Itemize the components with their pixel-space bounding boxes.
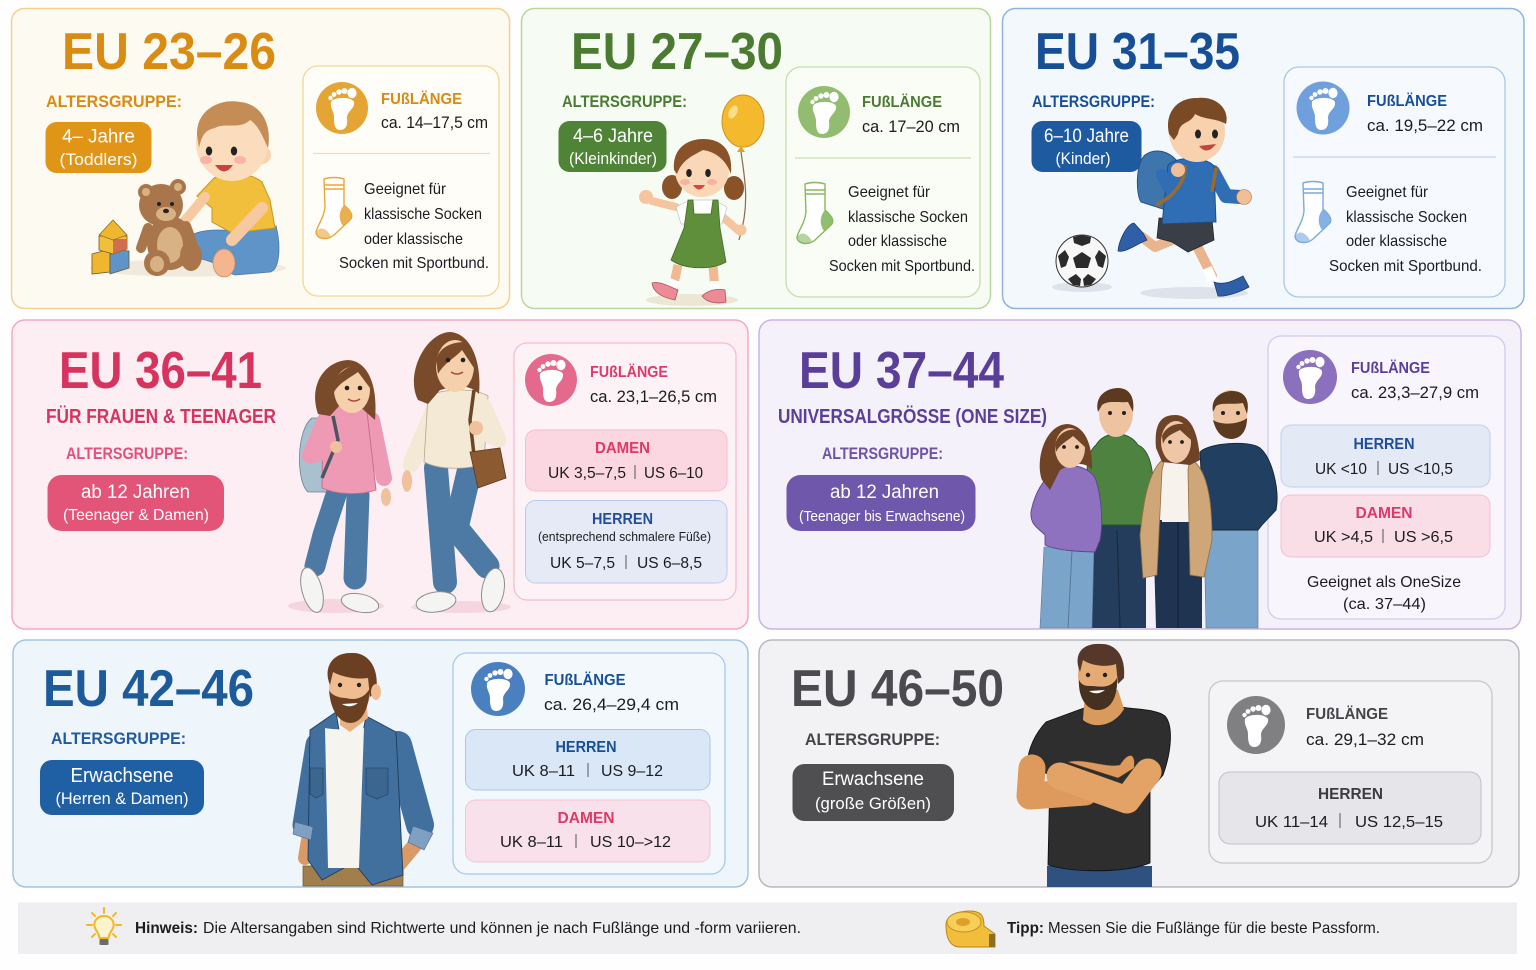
age badge: (Toddlers) — [60, 150, 138, 169]
icon: foot — [471, 662, 525, 716]
age badge: (Kinder) — [1056, 149, 1110, 168]
title: EU 37–44: EU 37–44 — [799, 342, 1004, 400]
foot length: ca. 23,1–26,5 cm — [590, 388, 717, 406]
icon: foot — [1227, 696, 1285, 754]
size box: Herren: HERREN — [1354, 436, 1414, 453]
size box: Herren: US <10,5 — [1388, 461, 1453, 478]
icon: foot — [1283, 350, 1337, 404]
size box: Damen — [1281, 495, 1490, 557]
age badge: 6–10 Jahre — [1044, 126, 1129, 147]
size box: Damen — [466, 800, 710, 862]
illustration: man in denim shirt — [293, 653, 433, 886]
title: EU 31–35: EU 31–35 — [1035, 23, 1240, 81]
panel: EU 46–50 — [759, 640, 1519, 887]
suitability text — [339, 181, 489, 272]
info card — [514, 343, 736, 600]
size box: Herren: HERREN — [592, 511, 653, 528]
foot length: ca. 14–17,5 cm — [381, 114, 488, 132]
size box: Herren: US 6–8,5 — [637, 555, 702, 572]
foot length: FUßLÄNGE — [1367, 93, 1447, 110]
age group label: ALTERSGRUPPE: — [66, 444, 188, 463]
suitability text: Geeignet für — [1346, 184, 1429, 201]
foot length: FUßLÄNGE — [381, 91, 462, 108]
suitability text: Socken mit Sportbund. — [829, 258, 975, 275]
note: Hinweis: Die Altersangaben sind Richtwerte und können je nach Fußlänge und -form variieren. — [203, 920, 801, 937]
age badge: (Teenager & Damen) — [63, 507, 209, 524]
size box: Damen: DAMEN — [1356, 505, 1412, 522]
footer note bar — [18, 902, 1517, 954]
info card — [453, 653, 725, 874]
size box: Herren: UK 11–14 — [1255, 814, 1328, 831]
size box: Damen — [526, 430, 727, 491]
foot length: ca. 17–20 cm — [862, 118, 960, 136]
size box: Herren: US 12,5–15 — [1355, 814, 1443, 831]
age badge: (Herren & Damen) — [56, 789, 188, 808]
age badge — [48, 475, 224, 531]
size box: Damen: DAMEN — [595, 440, 650, 457]
foot length — [381, 91, 488, 132]
age badge — [1032, 121, 1142, 172]
illustration: teen girl and woman — [288, 332, 511, 616]
size box: Herren: UK 5–7,5 — [550, 555, 615, 572]
size box: Herren — [1281, 425, 1490, 487]
age group label: ALTERSGRUPPE: — [562, 92, 687, 111]
info card — [303, 66, 499, 296]
age badge: 4–6 Jahre — [573, 126, 653, 147]
size box: Damen: UK 3,5–7,5 — [548, 465, 626, 482]
age group label: ALTERSGRUPPE: — [1032, 92, 1155, 111]
suitability text: oder klassische — [1346, 233, 1447, 250]
suitability text: Geeignet für — [848, 184, 931, 201]
icon: foot — [316, 82, 368, 134]
suitability text: oder klassische — [364, 231, 463, 248]
icon: sock — [797, 182, 833, 244]
title: EU 23–26: EU 23–26 — [62, 23, 276, 81]
info card — [1268, 336, 1505, 619]
age badge: Erwachsene — [70, 765, 174, 787]
panel: EU 23–26 — [12, 8, 510, 308]
illustration: boy with football — [1052, 98, 1252, 299]
size box: Damen: US 6–10 — [644, 465, 703, 482]
foot length: ca. 26,4–29,4 cm — [544, 696, 679, 714]
age group label: ALTERSGRUPPE: — [51, 729, 186, 748]
panel: EU 31–35 — [1002, 8, 1524, 308]
info card — [1284, 67, 1505, 297]
age badge: 4– Jahre — [62, 126, 135, 148]
note: Hinweis: Hinweis: — [135, 920, 198, 937]
illustration: man with crossed arms — [1027, 644, 1170, 887]
foot length: FUßLÄNGE — [590, 364, 668, 381]
icon: foot — [525, 354, 577, 406]
icon: foot — [798, 86, 850, 138]
age badge — [792, 764, 954, 821]
size box: Herren — [526, 500, 727, 583]
size box: Damen: US >6,5 — [1394, 529, 1453, 546]
icon: sock — [316, 178, 352, 239]
one size note: Geeignet als OneSize — [1307, 574, 1461, 591]
size box: Herren: HERREN — [1318, 786, 1383, 803]
size box: Herren — [466, 730, 710, 790]
foot length — [1367, 93, 1483, 135]
age badge: ab 12 Jahren — [81, 481, 190, 503]
age badge: (große Größen) — [815, 794, 931, 813]
age group label: ALTERSGRUPPE: — [46, 92, 182, 111]
age badge: (Teenager bis Erwachsene) — [799, 509, 965, 525]
foot length — [544, 672, 679, 714]
age badge: ab 12 Jahren — [830, 481, 939, 503]
illustration: girl with balloon — [639, 95, 764, 306]
foot length: ca. 23,3–27,9 cm — [1351, 384, 1479, 402]
panel: EU 27–30 — [522, 8, 990, 308]
foot length — [1351, 360, 1479, 402]
size box: Herren — [1219, 772, 1481, 844]
panel: EU 37–44 — [759, 320, 1521, 629]
age group label: ALTERSGRUPPE: — [822, 444, 943, 463]
suitability text — [1329, 184, 1482, 275]
suitability text: klassische Socken — [364, 206, 482, 223]
size box: Herren: HERREN — [556, 739, 616, 756]
one size note: (ca. 37–44) — [1343, 596, 1426, 613]
title: EU 46–50: EU 46–50 — [791, 660, 1004, 718]
icon: sock — [1295, 182, 1331, 243]
size box: Herren: (entsprechend schmalere Füße) — [538, 530, 711, 544]
illustration: group of four people — [1031, 388, 1277, 628]
note: Tipp: Messen Sie die Fußlänge für die beste Passform. — [1048, 920, 1380, 937]
subtitle: UNIVERSALGRÖSSE (ONE SIZE) — [778, 405, 1047, 428]
info card — [1209, 681, 1492, 863]
suitability text: klassische Socken — [848, 209, 968, 226]
subtitle: FÜR FRAUEN & TEENAGER — [46, 405, 276, 428]
foot length: FUßLÄNGE — [1351, 360, 1430, 377]
foot length: FUßLÄNGE — [544, 672, 626, 689]
info card — [786, 67, 980, 297]
size box: Herren: US 9–12 — [601, 763, 663, 780]
foot length: ca. 19,5–22 cm — [1367, 117, 1483, 135]
panel: EU 36–41 — [12, 320, 748, 629]
size box: Damen: DAMEN — [558, 810, 614, 827]
age badge — [46, 122, 152, 173]
foot length — [1306, 706, 1424, 749]
size box: Damen: UK 8–11 — [500, 834, 563, 851]
title: EU 36–41: EU 36–41 — [59, 342, 262, 400]
icon: light bulb — [87, 908, 121, 945]
suitability text — [829, 184, 975, 275]
suitability text: oder klassische — [848, 233, 947, 250]
size box: Herren: UK 8–11 — [512, 763, 575, 780]
icon: foot — [1296, 82, 1350, 134]
suitability text: klassische Socken — [1346, 209, 1467, 226]
note: Tipp: Tipp: — [1007, 920, 1044, 937]
foot length — [590, 364, 717, 406]
foot length — [862, 94, 960, 136]
age group label: ALTERSGRUPPE: — [805, 730, 940, 749]
panel: EU 42–46 — [13, 640, 748, 887]
foot length: FUßLÄNGE — [1306, 706, 1388, 723]
age badge — [786, 475, 976, 531]
foot length: ca. 29,1–32 cm — [1306, 731, 1424, 749]
size box: Damen: US 10–>12 — [590, 834, 671, 851]
suitability text: Geeignet für — [364, 181, 447, 198]
title: EU 42–46: EU 42–46 — [43, 660, 254, 718]
age badge — [40, 760, 204, 815]
suitability text: Socken mit Sportbund. — [1329, 258, 1482, 275]
size box: Herren: UK <10 — [1315, 461, 1367, 478]
size box: Damen: UK >4,5 — [1314, 529, 1373, 546]
title: EU 27–30: EU 27–30 — [571, 23, 783, 81]
foot length: FUßLÄNGE — [862, 94, 942, 111]
illustration: baby with teddy and blocks — [90, 101, 286, 277]
one size note — [1307, 574, 1461, 613]
age badge: Erwachsene — [822, 769, 924, 790]
age badge — [558, 121, 666, 172]
icon: measuring tape — [946, 911, 995, 947]
suitability text: Socken mit Sportbund. — [339, 255, 489, 272]
age badge: (Kleinkinder) — [569, 149, 657, 168]
